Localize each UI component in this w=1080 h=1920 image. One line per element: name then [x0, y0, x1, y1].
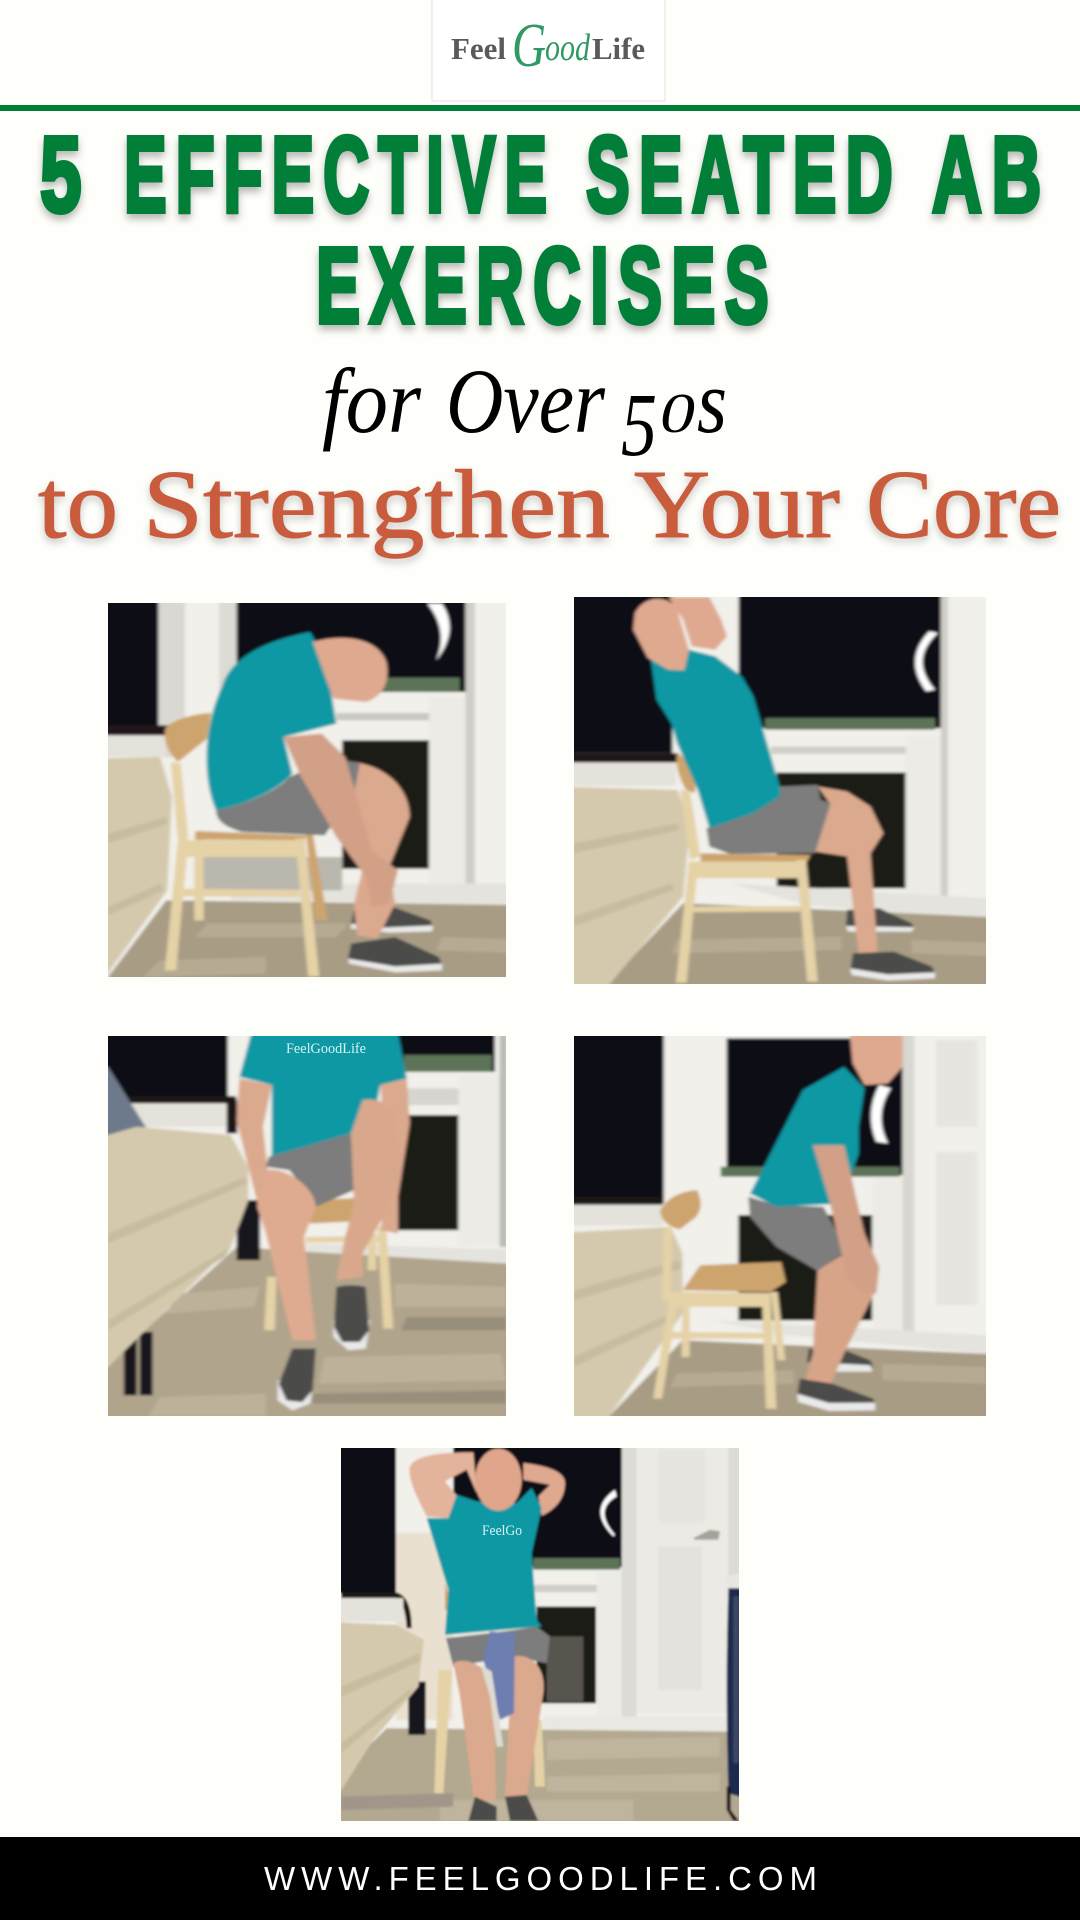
subtitle: for over 50s: Over	[446, 350, 606, 452]
logo: G	[512, 12, 546, 80]
chair	[165, 713, 211, 762]
title: 5 effective seated ab exercises: EFFECTIVE	[124, 114, 556, 234]
chair	[434, 1670, 452, 1793]
title: 5 effective seated ab exercises: 5	[40, 114, 92, 234]
subtitle: to strengthen your core	[38, 451, 1061, 558]
person	[351, 905, 433, 929]
photo 3: seated knee raise, front view	[108, 1036, 506, 1416]
subtitle: to strengthen your core: to	[38, 451, 118, 558]
title: 5 effective seated ab exercises: EXERCISES	[316, 224, 778, 346]
footer bar: WWW.FEELGOODLIFE.COM	[264, 1860, 817, 1897]
photo 1: seated forward crunch, side view	[108, 603, 506, 977]
subtitle: to strengthen your core: Your	[634, 451, 840, 558]
chair	[677, 753, 695, 793]
subtitle: for over 50s: s	[697, 353, 727, 452]
person	[409, 1452, 477, 1518]
subtitle: to strengthen your core: Core	[866, 451, 1061, 558]
subtitle: for over 50s: for	[322, 350, 422, 452]
subtitle: for over 50s: 0	[660, 383, 695, 445]
logo: Feel	[451, 31, 506, 66]
footer bar	[0, 1837, 1080, 1920]
logo: Life	[592, 31, 645, 66]
person	[846, 908, 915, 928]
shirt logo on photo 3: FeelGoodLife	[286, 1041, 366, 1057]
photo 4: sit to stand, side view	[574, 1036, 986, 1416]
green divider line	[0, 105, 1080, 111]
shirt logo on photo 5: FeelGo	[482, 1523, 522, 1539]
person	[807, 1349, 873, 1369]
photo 5: seated twist with towel, front view	[341, 1448, 739, 1821]
logo: ood	[545, 27, 591, 69]
person	[237, 1078, 272, 1213]
subtitle: for over 50s: 5	[621, 376, 657, 475]
subtitle: for over 50s	[322, 350, 727, 475]
subtitle: to strengthen your core: Strengthen	[143, 451, 610, 558]
title: 5 effective seated ab exercises	[40, 114, 1051, 346]
chair	[264, 1277, 276, 1330]
photo 2: seated lean back, side view	[574, 597, 986, 984]
logo	[432, 0, 665, 101]
chair	[662, 1227, 672, 1300]
